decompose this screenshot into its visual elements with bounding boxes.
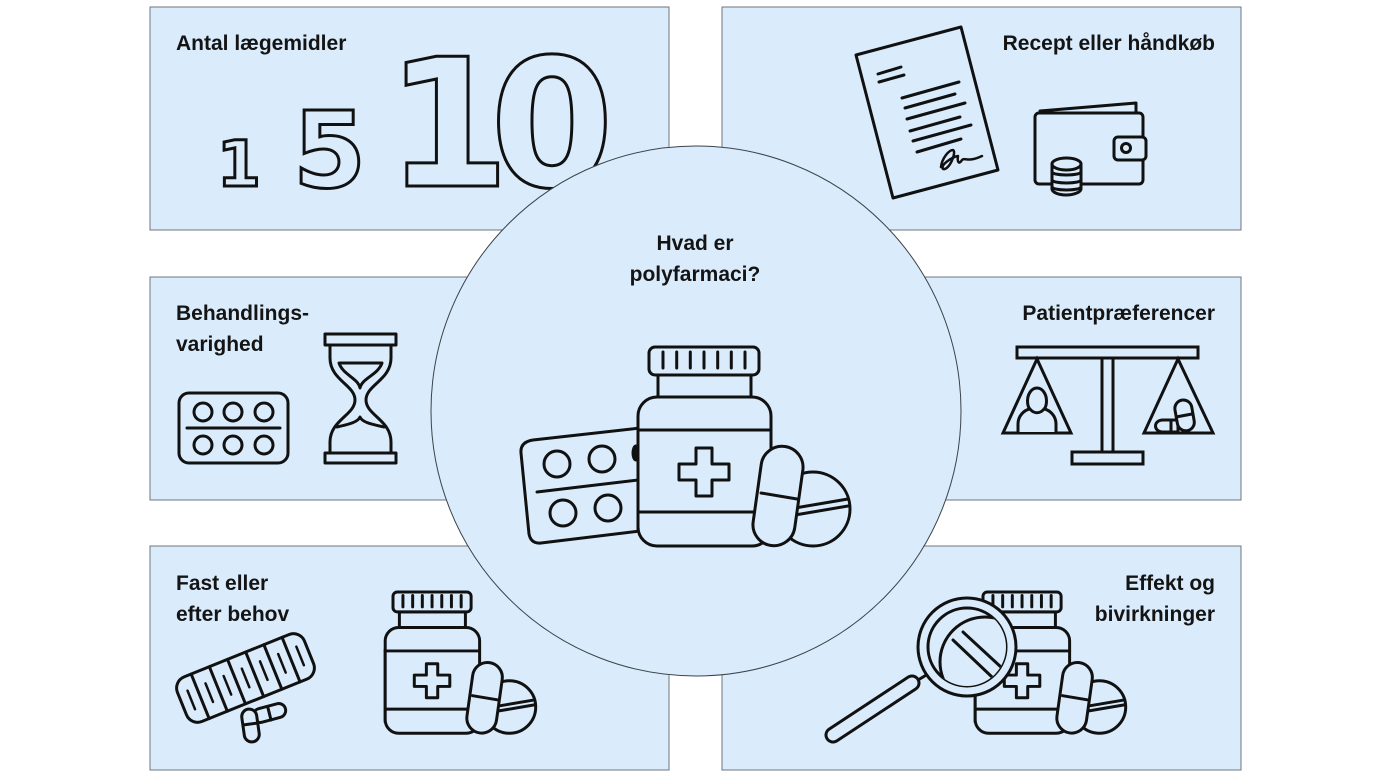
heading: behandlingsvarighed: varighed xyxy=(176,333,264,356)
icon: weekly pill organizer xyxy=(173,630,318,726)
heading: effekt og bivirkninger: bivirkninger xyxy=(1095,603,1215,626)
icon: blister pack xyxy=(179,393,288,463)
icon: two capsules xyxy=(241,702,287,743)
number 10: 1 xyxy=(386,21,510,228)
heading: fast eller efter behov: Fast eller xyxy=(176,572,268,595)
icon: prescription document xyxy=(856,27,998,198)
panel: behandlingsvarighed xyxy=(150,277,669,500)
heading: hvad er polyfarmaci: Hvad er xyxy=(656,232,734,255)
icon: wallet with coins xyxy=(1035,103,1146,195)
number 10: 0 xyxy=(490,21,614,228)
number 1: 1 xyxy=(217,128,261,201)
panel: effekt og bivirkninger xyxy=(722,546,1241,770)
heading: behandlingsvarighed: Behandlings- xyxy=(176,302,309,325)
icon: hourglass xyxy=(325,334,396,463)
panel: recept eller håndkøb xyxy=(722,7,1241,230)
heading: recept eller håndkøb: Recept eller håndkøb xyxy=(1003,32,1215,55)
icon: blister pack, bottle and pills xyxy=(521,347,850,548)
panel: antal lægemidler xyxy=(150,7,669,230)
heading: effekt og bivirkninger: Effekt og xyxy=(1125,572,1215,595)
heading: patientpræferencer: Patientpræferencer xyxy=(1022,302,1215,325)
icon: medicine bottle behind magnifier xyxy=(975,592,1126,735)
icon: medicine bottle xyxy=(385,592,536,735)
icon: balance scale xyxy=(1003,347,1213,464)
panel: patientpræferencer xyxy=(722,277,1241,500)
heading: antal lægemidler: Antal lægemidler xyxy=(176,32,346,55)
heading: hvad er polyfarmaci: polyfarmaci? xyxy=(630,263,760,286)
number 5: 5 xyxy=(293,90,366,212)
heading: fast eller efter behov: efter behov xyxy=(176,603,290,626)
icon: magnifying glass over pill xyxy=(833,598,1030,735)
panel: fast eller efter behov xyxy=(150,546,669,770)
central circle xyxy=(431,146,961,676)
